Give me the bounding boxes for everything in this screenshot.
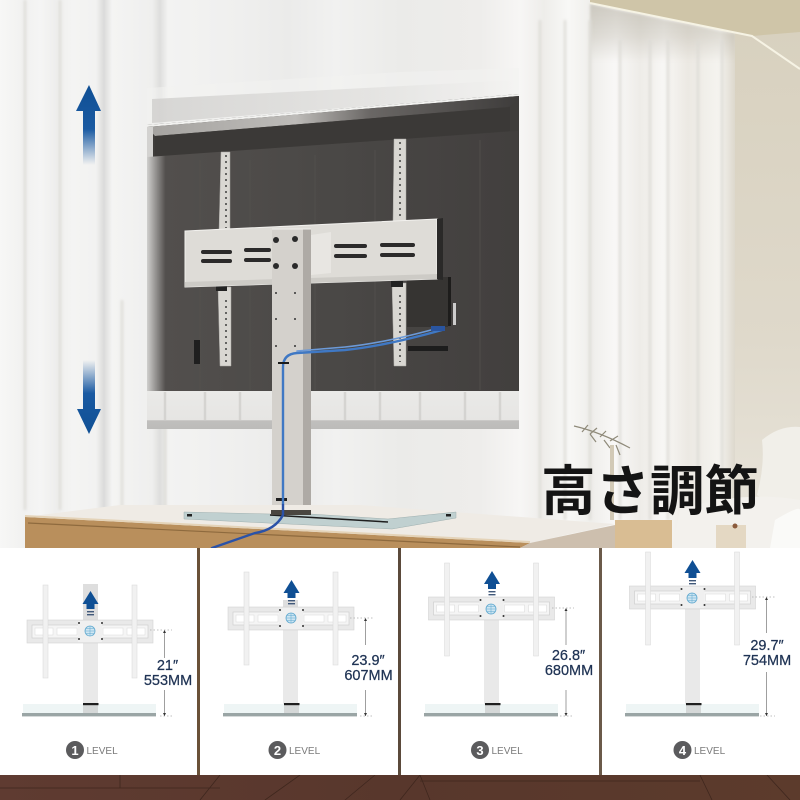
label level 3: 3 xyxy=(476,743,484,758)
blue cable xyxy=(212,326,445,548)
panel: level 4 xyxy=(602,548,800,775)
dimension level 3: 26.8″ xyxy=(552,648,585,664)
glass base xyxy=(184,498,456,529)
label level 2: LEVEL xyxy=(289,746,321,757)
label level 4 xyxy=(674,741,726,759)
label level 1: LEVEL xyxy=(86,746,118,757)
dimension level 4: 29.7″ xyxy=(750,638,784,654)
room background xyxy=(0,0,800,548)
label level 3 xyxy=(471,741,523,759)
label level 2: 2 xyxy=(274,743,281,758)
dimension level 1: 553MM xyxy=(144,673,192,689)
arrow: down xyxy=(77,360,101,434)
panel: level 1 xyxy=(0,548,197,775)
horizontal mounting bracket xyxy=(185,218,443,287)
dimension level 4: 754MM xyxy=(743,653,791,669)
dimension level 3 xyxy=(545,608,593,716)
label level 1: 1 xyxy=(71,743,79,758)
panel: level 3 xyxy=(401,548,599,775)
table xyxy=(25,505,672,548)
stand column xyxy=(272,229,311,515)
dimension level 2 xyxy=(344,618,393,716)
bed and pillows xyxy=(672,427,800,548)
arrow: up xyxy=(76,85,101,165)
dimension level 1: 21″ xyxy=(157,658,178,674)
dimension level 4 xyxy=(743,597,791,716)
label level 4: LEVEL xyxy=(694,746,726,757)
dimension level 3: 680MM xyxy=(545,663,593,679)
stand level 1 xyxy=(22,584,156,716)
heading: 高さ調節 xyxy=(541,462,759,522)
dimension level 1 xyxy=(144,630,192,716)
stand level 4 xyxy=(625,552,759,716)
panel: level 2 xyxy=(200,548,398,775)
stand level 2 xyxy=(223,572,357,716)
label level 3: LEVEL xyxy=(492,746,523,757)
dimension level 2: 607MM xyxy=(344,668,393,684)
dimension level 2: 23.9″ xyxy=(351,653,385,669)
stand level 3 xyxy=(424,563,558,716)
wood floor xyxy=(0,548,800,800)
label level 1 xyxy=(66,741,118,759)
label level 4: 4 xyxy=(679,743,687,758)
plant xyxy=(574,425,630,520)
label level 2 xyxy=(268,741,321,759)
VESA uprights xyxy=(216,139,406,366)
television rear with raised ghost xyxy=(147,68,519,429)
